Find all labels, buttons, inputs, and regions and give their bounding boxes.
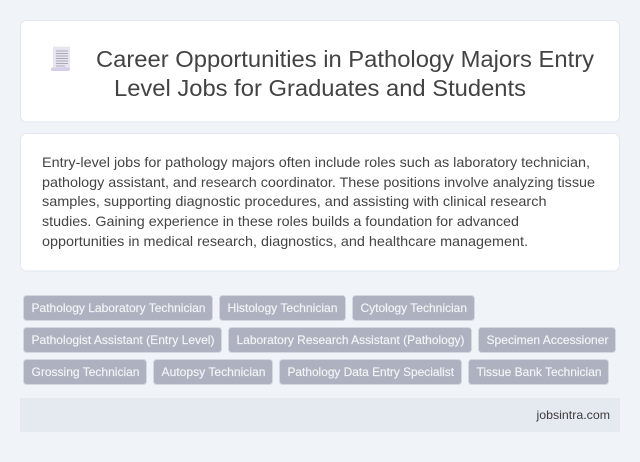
title: Level Jobs for Graduates and Students <box>114 75 526 101</box>
tag: Histology Technician: Histology Technician <box>228 301 338 315</box>
tag: Pathology Laboratory Technician: Pathology Laboratory Technician <box>32 301 206 315</box>
text block: description: studies. Gaining experience in these roles builds a foundation for advanced <box>42 213 519 229</box>
text block: description <box>42 154 595 249</box>
tag: Laboratory Research Assistant (Pathology): Laboratory Research Assistant (Pathology) <box>236 333 464 347</box>
tag: Pathologist Assistant (Entry Level) <box>24 328 222 352</box>
tag: Pathologist Assistant (Entry Level): Pathologist Assistant (Entry Level) <box>32 333 214 347</box>
tag: Grossing Technician: Grossing Technician <box>32 365 140 379</box>
footer <box>20 398 620 432</box>
tag: Autopsy Technician: Autopsy Technician <box>162 365 266 379</box>
icon: document scroll <box>51 46 70 71</box>
tag: Cytology Technician <box>352 296 474 320</box>
panel: description <box>20 134 620 271</box>
tag: Tissue Bank Technician <box>468 360 608 384</box>
text block: description: Entry-level jobs for pathology majors often include roles such as laboratory technician, <box>42 154 590 170</box>
text block: description: opportunities in medical research, diagnostics, and healthcare management. <box>42 233 528 249</box>
text block: description: pathology assistant, and research coordinator. These positions involve analyzing tissue <box>42 174 595 190</box>
footer: jobsintra.com <box>535 408 610 422</box>
tag: Pathology Data Entry Specialist: Pathology Data Entry Specialist <box>288 365 455 379</box>
tag: Specimen Accessioner: Specimen Accessioner <box>486 333 608 347</box>
tag: Grossing Technician <box>24 360 146 384</box>
tag: Tissue Bank Technician: Tissue Bank Technician <box>476 365 602 379</box>
title: Career Opportunities in Pathology Majors Entry <box>96 46 594 72</box>
tag: Histology Technician <box>220 296 346 320</box>
panel: header <box>20 20 620 122</box>
tag: Laboratory Research Assistant (Pathology) <box>228 328 472 352</box>
text block: description: samples, supporting diagnostic procedures, and assisting with clinical research <box>42 193 546 209</box>
tag: Specimen Accessioner <box>478 328 616 352</box>
tag: Autopsy Technician <box>154 360 272 384</box>
tag: Pathology Data Entry Specialist <box>280 360 462 384</box>
tag: Pathology Laboratory Technician <box>24 296 212 320</box>
title <box>96 46 594 101</box>
tag: Cytology Technician: Cytology Technician <box>360 301 467 315</box>
